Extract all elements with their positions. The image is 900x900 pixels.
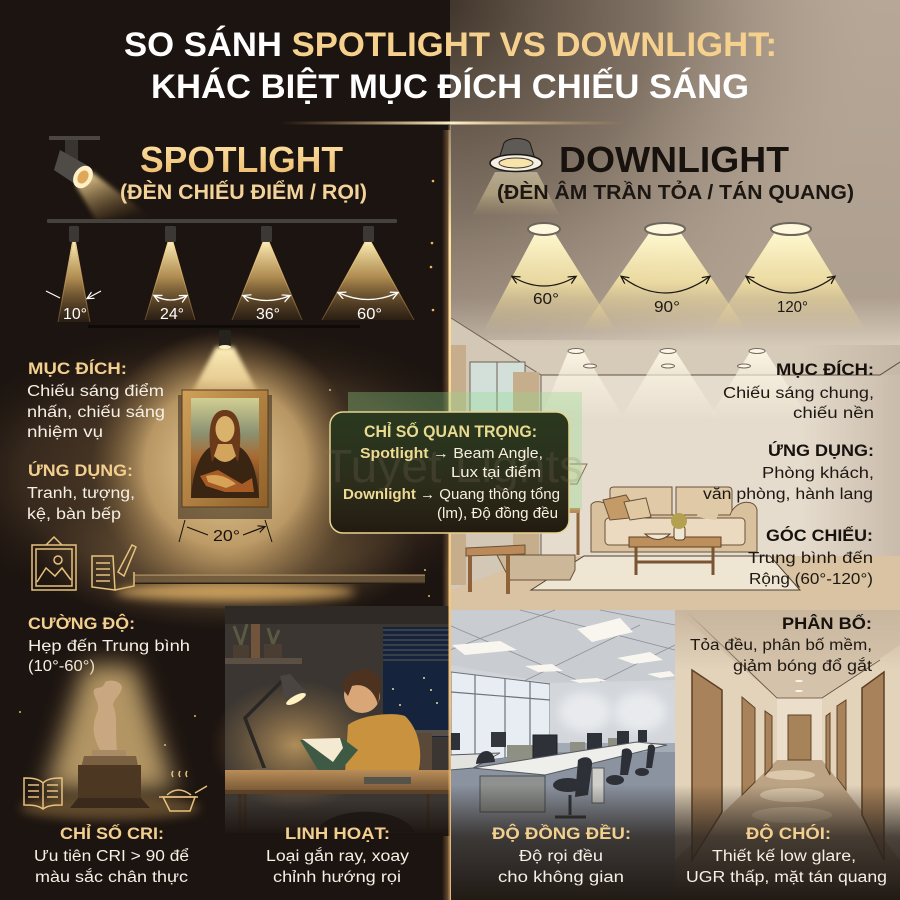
heading: spotlight: (ĐÈN CHIẾU ĐIỂM / RỌI) bbox=[120, 181, 367, 204]
text: spotlight CRI: màu sắc chân thực bbox=[35, 869, 188, 886]
panel: downlight light background bbox=[450, 0, 900, 900]
text: downlight glare: ĐỘ CHÓI: bbox=[746, 824, 831, 843]
downlight 120 degrees bbox=[710, 223, 867, 332]
chart: downlight beam angles bbox=[483, 223, 867, 332]
icon: framed picture bbox=[32, 537, 76, 590]
heading: downlight bbox=[497, 139, 854, 204]
illustration: wall shelf with glow bbox=[115, 574, 425, 601]
icon: steaming pot bbox=[159, 771, 207, 811]
text: downlight glare: Thiết kế low glare, bbox=[712, 848, 856, 865]
scattered sparkles bbox=[19, 180, 434, 746]
callout spotlight metrics: Spotlight → Beam Angle, bbox=[360, 445, 543, 462]
watermark text: Tuyet Lights bbox=[323, 440, 583, 492]
beam 36 degrees bbox=[232, 226, 302, 323]
title: SO SÁNH SPOTLIGHT VS DOWNLIGHT: bbox=[124, 26, 777, 64]
text: downlight purpose: chiếu nền bbox=[793, 405, 874, 422]
icon: open book bbox=[24, 778, 62, 809]
text: downlight applications: ỨNG DỤNG: bbox=[768, 441, 874, 460]
second track rail bbox=[88, 325, 360, 328]
text: spotlight flexibility: LINH HOẠT: bbox=[285, 825, 390, 843]
callout spotlight metrics: Lux tại điểm bbox=[451, 464, 541, 481]
text: downlight distribution: giảm bóng đổ gắt bbox=[733, 658, 873, 675]
text: spotlight applications: ỨNG DỤNG: bbox=[28, 461, 133, 480]
text: spotlight purpose: nhấn, chiếu sáng bbox=[27, 404, 165, 421]
heading: spotlight: SPOTLIGHT bbox=[140, 139, 343, 180]
text: downlight distribution bbox=[690, 613, 873, 675]
beam 36 degrees: 36° bbox=[256, 306, 280, 323]
text: downlight distribution: Tỏa đều, phân bố mềm, bbox=[690, 637, 872, 654]
icon: downlight fixture bbox=[472, 138, 560, 216]
text: spotlight purpose: MỤC ĐÍCH: bbox=[28, 359, 127, 378]
illustration: living room with recessed lights bbox=[451, 318, 900, 612]
text: downlight purpose bbox=[723, 360, 874, 422]
text: spotlight flexibility: chỉnh hướng rọi bbox=[273, 869, 401, 886]
text: downlight purpose: MỤC ĐÍCH: bbox=[776, 360, 874, 379]
illustration: spotlit sculpture on pedestal bbox=[20, 665, 200, 820]
text: downlight distribution: PHÂN BỐ: bbox=[782, 613, 872, 633]
centre vertical glow bbox=[442, 130, 450, 900]
beam 60 degrees bbox=[322, 226, 414, 323]
watermark panel bbox=[348, 392, 582, 510]
text: downlight beam angle bbox=[748, 526, 873, 588]
illustration: man reading at desk under lamp bbox=[210, 606, 450, 836]
header horizontal glowing line bbox=[280, 122, 625, 124]
text: spotlight CRI: CHỈ SỐ CRI: bbox=[60, 823, 164, 843]
callout spotlight metrics bbox=[360, 445, 543, 481]
text: spotlight flexibility: Loại gắn ray, xoay bbox=[266, 848, 409, 865]
text: downlight uniformity bbox=[492, 824, 631, 886]
beam 24 degrees: 24° bbox=[160, 306, 184, 323]
beam 60 degrees: 60° bbox=[357, 306, 382, 323]
downlight 120 degrees: 120° bbox=[777, 299, 808, 316]
track rail bbox=[47, 219, 397, 223]
text: spotlight intensity: Hẹp đến Trung bình bbox=[28, 638, 190, 655]
title: KHÁC BIỆT MỤC ĐÍCH CHIẾU SÁNG bbox=[151, 68, 749, 106]
panel: spotlight dark background bbox=[0, 0, 450, 900]
text: spotlight applications bbox=[27, 461, 135, 523]
title bbox=[124, 26, 777, 106]
chart: spotlight beam angles bbox=[46, 226, 414, 323]
callout downlight metrics bbox=[343, 486, 560, 522]
text: downlight uniformity: cho không gian bbox=[498, 869, 624, 886]
callout downlight metrics: Downlight → Quang thông tổng bbox=[343, 486, 560, 503]
illustration: open-plan office bbox=[450, 610, 675, 900]
text: downlight uniformity: ĐỘ ĐỒNG ĐỀU: bbox=[492, 824, 631, 843]
header shading on the light side bbox=[450, 0, 900, 340]
text: spotlight flexibility bbox=[266, 825, 409, 886]
text: spotlight purpose: Chiếu sáng điểm bbox=[27, 383, 164, 400]
text: spotlight intensity: (10°-60°) bbox=[28, 658, 95, 675]
icon: book and pen bbox=[92, 545, 136, 590]
illustration: spotlit painting on wall bbox=[0, 325, 515, 630]
text: downlight applications bbox=[703, 441, 874, 503]
text: downlight glare: UGR thấp, mặt tán quang bbox=[686, 869, 887, 886]
text: spotlight purpose: nhiệm vụ bbox=[27, 424, 103, 441]
downlight 90 degrees bbox=[580, 223, 748, 332]
text: downlight applications: Phòng khách, bbox=[762, 465, 874, 482]
text: downlight applications: văn phòng, hành lang bbox=[703, 486, 873, 503]
icon: angled spotlight fixture with beam bbox=[49, 136, 150, 220]
text: downlight beam angle: Trung bình đến bbox=[748, 550, 873, 567]
centre divider bbox=[448, 125, 451, 900]
text: spotlight applications: kệ, bàn bếp bbox=[27, 506, 121, 523]
beam 24 degrees bbox=[145, 226, 195, 323]
callout heading: CHỈ SỐ QUAN TRỌNG: bbox=[364, 421, 537, 441]
text: downlight glare bbox=[686, 824, 887, 886]
text: spotlight applications: Tranh, tượng, bbox=[27, 485, 135, 502]
heading: downlight: DOWNLIGHT bbox=[559, 139, 789, 180]
text: spotlight intensity: CƯỜNG ĐỘ: bbox=[28, 614, 135, 633]
text: spotlight purpose bbox=[27, 359, 165, 441]
beam 10 degrees bbox=[46, 226, 101, 323]
illustration: hallway with downlights bbox=[675, 610, 900, 900]
callout: key metrics bbox=[323, 412, 583, 533]
downlight 60 degrees: 60° bbox=[533, 291, 559, 308]
downlight 90 degrees: 90° bbox=[654, 299, 680, 316]
illustration: spotlit painting on wall: 20° bbox=[213, 528, 240, 545]
text: spotlight CRI bbox=[34, 823, 189, 886]
heading: spotlight bbox=[120, 139, 367, 204]
text: spotlight intensity bbox=[28, 614, 190, 675]
callout downlight metrics: (lm), Độ đồng đều bbox=[437, 505, 558, 522]
heading: downlight: (ĐÈN ÂM TRẦN TỎA / TÁN QUANG) bbox=[497, 180, 854, 204]
text: downlight beam angle: GÓC CHIẾU: bbox=[766, 526, 873, 545]
beam 10 degrees: 10° bbox=[63, 306, 87, 323]
text: downlight purpose: Chiếu sáng chung, bbox=[723, 385, 874, 402]
downlight 60 degrees bbox=[483, 223, 617, 332]
text: downlight uniformity: Độ rọi đều bbox=[519, 848, 603, 865]
text: downlight beam angle: Rộng (60°-120°) bbox=[749, 571, 873, 588]
text: spotlight CRI: Ưu tiên CRI > 90 để bbox=[34, 848, 189, 865]
